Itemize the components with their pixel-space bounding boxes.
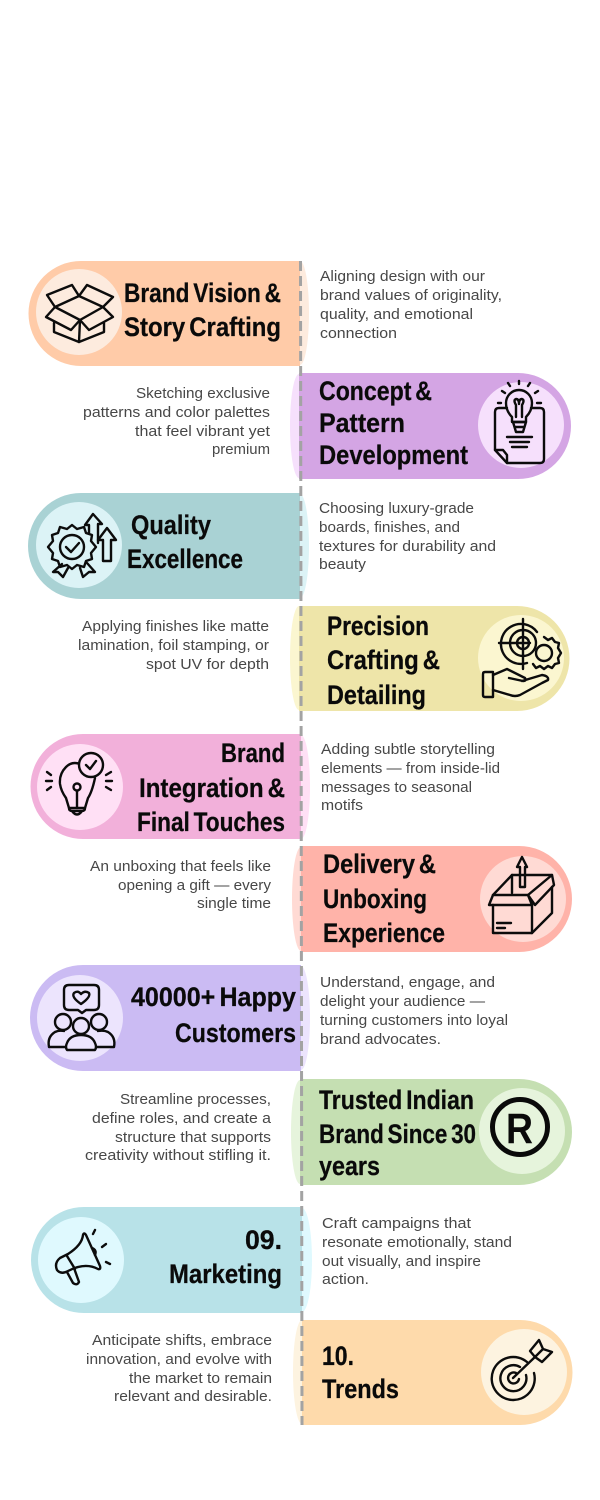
- heading: 10.: [322, 1341, 354, 1371]
- icon: megaphone: [56, 1230, 110, 1284]
- description: Sketching exclusive: [136, 386, 270, 402]
- heading: [323, 849, 445, 948]
- heading: Brand Vision &: [124, 278, 281, 308]
- pill background: [301, 846, 572, 952]
- pill background: [300, 1079, 572, 1185]
- icon: registered mark: [492, 1100, 548, 1154]
- heading: Brand Since 30: [319, 1119, 476, 1149]
- description: Anticipate shifts, embrace: [92, 1333, 272, 1349]
- heading: [127, 510, 243, 574]
- heading: [319, 376, 468, 470]
- description: action.: [322, 1272, 369, 1288]
- icon: unboxing box: [489, 857, 554, 933]
- icon circle: [36, 502, 122, 588]
- icon circle: [478, 615, 564, 701]
- description: [322, 1216, 512, 1288]
- panel: step 3 quality: [28, 493, 496, 599]
- heading: Trends: [322, 1374, 399, 1404]
- heading: Integration &: [139, 773, 285, 803]
- heading: Pattern: [319, 408, 405, 438]
- dashed center timeline: [300, 261, 302, 1425]
- pill background: [302, 1320, 572, 1425]
- pill background: [31, 734, 301, 839]
- pill background: [299, 606, 570, 711]
- description: relevant and desirable.: [114, 1389, 272, 1405]
- pill background: [31, 1207, 302, 1313]
- description: structure that supports: [115, 1130, 271, 1146]
- heading: [327, 611, 440, 710]
- heading: Delivery &: [323, 849, 436, 879]
- description: creativity without stifling it.: [85, 1148, 271, 1164]
- icon: idea document: [495, 381, 544, 463]
- icon circle: [37, 975, 123, 1061]
- description: lamination, foil stamping, or: [78, 638, 269, 654]
- description: Understand, engage, and: [320, 975, 495, 991]
- description: opening a gift — every: [118, 878, 272, 894]
- heading: Brand: [221, 738, 285, 768]
- heading: Precision: [327, 611, 429, 641]
- pill background: [299, 373, 571, 479]
- description: the market to remain: [129, 1371, 272, 1387]
- heading: Crafting &: [327, 645, 440, 675]
- description: An unboxing that feels like: [90, 859, 271, 875]
- icon: bulb with check: [46, 753, 112, 814]
- description: brand values of originality,: [320, 288, 502, 304]
- description: turning customers into loyal: [320, 1013, 508, 1029]
- description: single time: [197, 896, 271, 912]
- description: [320, 269, 502, 342]
- heading: Excellence: [127, 544, 243, 574]
- description: [90, 859, 272, 912]
- icon: quality badge with arrows: [48, 514, 116, 577]
- heading: [137, 738, 285, 837]
- icon: target, gear and hand: [483, 619, 561, 697]
- pill background: [29, 261, 300, 366]
- heading: Unboxing: [323, 884, 427, 914]
- heading: Concept &: [319, 376, 432, 406]
- description: [86, 1333, 272, 1405]
- heading: Trusted Indian: [319, 1085, 474, 1115]
- panel: step 2 concept: [83, 373, 571, 479]
- heading: 09.: [245, 1225, 282, 1255]
- description: Applying finishes like matte: [82, 619, 269, 635]
- description: boards, finishes, and: [319, 520, 460, 536]
- description: premium: [212, 442, 270, 458]
- icon: open box: [46, 285, 113, 342]
- heading: years: [319, 1151, 380, 1181]
- icon circle: [478, 382, 564, 468]
- description: Aligning design with our: [320, 269, 485, 285]
- icon circle: [479, 1088, 565, 1174]
- description: beauty: [319, 557, 367, 573]
- description: [83, 386, 270, 458]
- description: Adding subtle storytelling: [321, 742, 495, 758]
- heading: Story Crafting: [124, 312, 281, 342]
- description: [319, 501, 496, 573]
- description: Choosing luxury-grade: [319, 501, 474, 517]
- heading: Development: [319, 440, 468, 470]
- description: patterns and color palettes: [83, 405, 270, 421]
- panel: step 5 brand integration: [31, 734, 500, 839]
- heading: Marketing: [169, 1259, 282, 1289]
- heading: 40000+ Happy: [131, 982, 296, 1012]
- description: messages to seasonal: [321, 780, 472, 796]
- pill background: [28, 493, 300, 599]
- description: elements — from inside-lid: [321, 761, 500, 777]
- icon: registered mark: R: [506, 1105, 533, 1153]
- heading: Detailing: [327, 680, 426, 710]
- description: brand advocates.: [320, 1032, 441, 1048]
- heading: Final Touches: [137, 807, 285, 837]
- panel: step 10 trends: [86, 1320, 572, 1425]
- icon circle: [38, 1217, 124, 1303]
- pill background: [30, 965, 301, 1071]
- panel: step 1 brand vision: [29, 261, 502, 366]
- heading: Quality: [131, 510, 211, 540]
- description: resonate emotionally, stand: [322, 1235, 512, 1251]
- description: quality, and emotional: [320, 307, 473, 323]
- panel: step 4 precision: [78, 606, 570, 711]
- description: [78, 619, 269, 673]
- icon circle: [481, 1329, 567, 1415]
- heading: [322, 1341, 399, 1404]
- description: that feel vibrant yet: [135, 424, 270, 440]
- panel: step 6 delivery: [90, 846, 572, 952]
- description: textures for durability and: [319, 539, 496, 555]
- icon circle: [37, 744, 123, 830]
- description: innovation, and evolve with: [86, 1352, 272, 1368]
- heading: Customers: [175, 1018, 296, 1048]
- description: define roles, and create a: [92, 1111, 272, 1127]
- description: Streamline processes,: [120, 1092, 271, 1108]
- panel: step 7 happy customers: [30, 965, 508, 1071]
- description: [320, 975, 508, 1048]
- heading: [131, 982, 296, 1048]
- heading: [319, 1085, 476, 1181]
- heading: Experience: [323, 918, 445, 948]
- icon circle: [36, 269, 122, 355]
- description: Craft campaigns that: [322, 1216, 471, 1232]
- panel: step 8 trusted brand: [85, 1079, 572, 1185]
- description: [85, 1092, 272, 1164]
- description: motifs: [321, 798, 363, 814]
- description: [321, 742, 500, 814]
- icon circle: [480, 856, 566, 942]
- icon: bullseye with arrow: [492, 1340, 552, 1400]
- description: delight your audience —: [320, 994, 486, 1010]
- heading: [169, 1225, 282, 1289]
- panel: step 9 marketing: [31, 1207, 512, 1313]
- description: connection: [320, 326, 397, 342]
- heading: [124, 278, 281, 342]
- description: out visually, and inspire: [322, 1254, 481, 1270]
- icon: customers with heart: [49, 985, 114, 1050]
- description: spot UV for depth: [146, 657, 269, 673]
